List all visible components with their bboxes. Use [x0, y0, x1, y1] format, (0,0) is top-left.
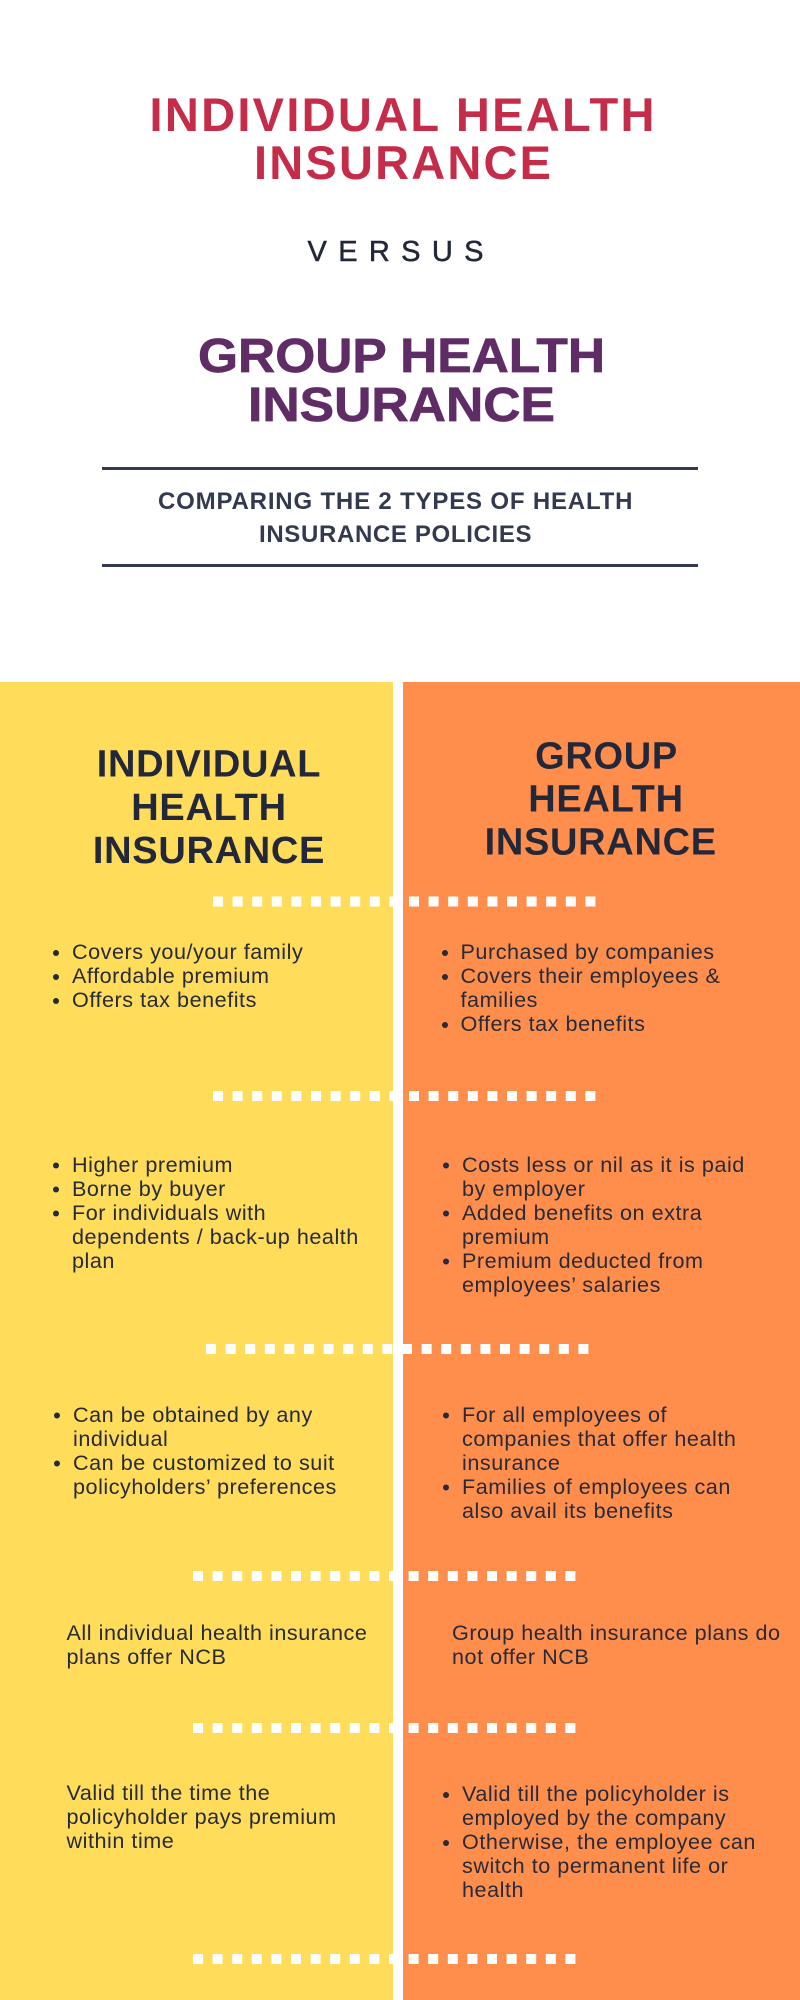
- individual: row 4 text: All individual health insurance: [66, 1620, 367, 1645]
- group: row 3 list: companies that offer health: [462, 1426, 736, 1451]
- title: individual health insurance: [150, 88, 654, 189]
- group: row 1 list: Covers their employees &: [460, 963, 721, 988]
- title: group health insurance: INSURANCE: [248, 379, 555, 432]
- group: row 2 list: premium: [462, 1224, 550, 1249]
- individual: row 3 list: individual: [73, 1426, 168, 1451]
- individual: row 5 text: policyholder pays premium: [66, 1804, 337, 1829]
- group: row 3 list: insurance: [462, 1450, 560, 1475]
- heading: group column: GROUP: [535, 736, 678, 778]
- group: row 2 list: Added benefits on extra: [462, 1200, 703, 1225]
- individual: row 5 text: [66, 1780, 337, 1853]
- individual: row 5 text: within time: [66, 1828, 174, 1853]
- individual: row 1 list: Affordable premium: [72, 963, 270, 988]
- heading: group column: [485, 736, 717, 864]
- group: row 3 list: [443, 1402, 736, 1523]
- dotted divider 3: [206, 1344, 588, 1354]
- heading: versus: VERSUS: [308, 236, 484, 268]
- individual: row 1 list: Covers you/your family: [72, 939, 303, 964]
- individual: row 2 list: [53, 1152, 359, 1273]
- heading: individual column: HEALTH: [131, 787, 287, 829]
- title: group health insurance: GROUP HEALTH: [198, 330, 605, 383]
- individual: row 3 list: Can be obtained by any: [73, 1402, 313, 1427]
- subtitle block with rules: COMPARING THE 2 TYPES OF HEALTH: [158, 488, 632, 515]
- heading: individual column: [93, 744, 325, 872]
- individual: row 1 list: [53, 939, 303, 1012]
- subtitle block with rules: INSURANCE POLICIES: [259, 521, 532, 548]
- dotted divider 2: [213, 1091, 595, 1101]
- group: row 5 list: [443, 1781, 756, 1902]
- dotted divider 1: [213, 896, 595, 906]
- group: row 5 list: Otherwise, the employee can: [462, 1829, 756, 1854]
- individual: row 3 list: policyholders’ preferences: [73, 1474, 337, 1499]
- group: row 5 list: switch to permanent life or: [462, 1853, 728, 1878]
- individual: row 2 list: Higher premium: [72, 1152, 233, 1177]
- individual: row 1 list: Offers tax benefits: [72, 987, 257, 1012]
- panel: group column: [403, 682, 800, 2000]
- individual: row 4 text: plans offer NCB: [66, 1644, 226, 1669]
- title: individual health insurance: INSURANCE: [254, 136, 551, 189]
- panel: individual column: [0, 682, 393, 2000]
- group: row 2 list: [443, 1152, 745, 1297]
- group: row 1 list: [442, 939, 721, 1036]
- individual: row 2 list: Borne by buyer: [72, 1176, 226, 1201]
- group: row 1 list: Offers tax benefits: [460, 1011, 645, 1036]
- group: row 1 list: families: [460, 987, 538, 1012]
- group: row 3 list: also avail its benefits: [462, 1498, 673, 1523]
- title: individual health insurance: INDIVIDUAL HEALTH: [150, 88, 654, 141]
- group: row 1 list: Purchased by companies: [460, 939, 715, 964]
- individual: row 5 text: Valid till the time the: [66, 1780, 270, 1805]
- group: row 2 list: Premium deducted from: [462, 1248, 704, 1273]
- group: row 2 list: by employer: [462, 1176, 585, 1201]
- group: row 4 text: [452, 1620, 781, 1669]
- group: row 5 list: Valid till the policyholder is: [462, 1781, 730, 1806]
- group: row 4 text: Group health insurance plans do: [452, 1620, 781, 1645]
- individual: row 2 list: For individuals with: [72, 1200, 266, 1225]
- individual: row 4 text: [66, 1620, 367, 1669]
- group: row 5 list: employed by the company: [462, 1805, 726, 1830]
- heading: group column: HEALTH: [528, 779, 684, 821]
- individual: row 2 list: dependents / back-up health: [72, 1224, 359, 1249]
- dotted divider 4: [193, 1571, 575, 1581]
- dotted divider 5: [193, 1723, 575, 1733]
- subtitle block with rules: [102, 467, 698, 567]
- group: row 5 list: health: [462, 1877, 524, 1902]
- individual: row 3 list: Can be customized to suit: [73, 1450, 335, 1475]
- heading: group column: INSURANCE: [485, 822, 717, 864]
- dotted divider 6: [193, 1954, 575, 1964]
- title: group health insurance: [198, 330, 605, 432]
- individual: row 2 list: plan: [72, 1248, 115, 1273]
- group: row 3 list: Families of employees can: [462, 1474, 731, 1499]
- group: row 2 list: employees’ salaries: [462, 1272, 661, 1297]
- heading: individual column: INSURANCE: [93, 830, 325, 872]
- heading: individual column: INDIVIDUAL: [97, 744, 321, 786]
- individual: row 3 list: [54, 1402, 337, 1499]
- group: row 2 list: Costs less or nil as it is paid: [462, 1152, 745, 1177]
- group: row 4 text: not offer NCB: [452, 1644, 589, 1669]
- group: row 3 list: For all employees of: [462, 1402, 667, 1427]
